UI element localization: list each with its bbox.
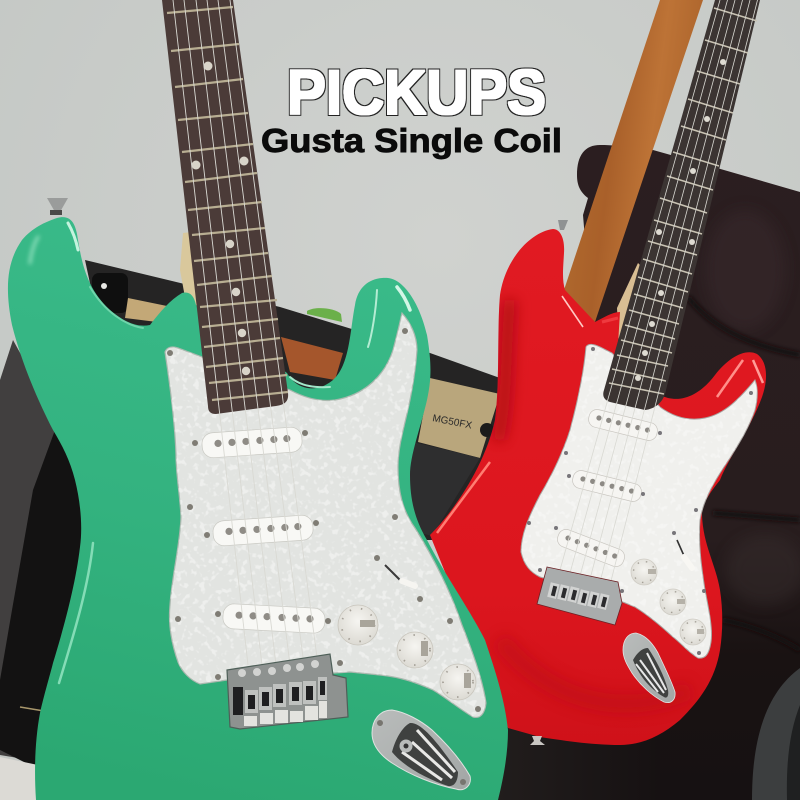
green neck fretboard xyxy=(162,0,288,414)
red jack plate xyxy=(623,633,675,703)
green body highlights xyxy=(30,223,410,683)
green pickup middle xyxy=(212,515,314,546)
red pickup middle xyxy=(571,469,643,503)
green body xyxy=(8,217,508,800)
cream neck side xyxy=(180,232,205,352)
title: PICKUPS: PICKUPS xyxy=(287,58,546,128)
amp grille xyxy=(404,442,480,536)
cabinet black side xyxy=(0,430,85,770)
cabinet gold line xyxy=(20,707,44,711)
red strap button xyxy=(558,220,568,230)
red body xyxy=(430,229,766,745)
green knobs and switch xyxy=(338,565,476,700)
red pickguard xyxy=(520,344,758,659)
green strings xyxy=(173,0,318,665)
amp model label: MG50FX xyxy=(431,413,473,432)
green pickguard xyxy=(164,312,487,718)
subtitle: Gusta Single Coil: Gusta Single Coil xyxy=(261,122,562,159)
green strap button xyxy=(47,198,68,215)
dark speaker cabinet left xyxy=(0,340,90,800)
red pickup neck xyxy=(587,408,659,442)
red guitar xyxy=(430,0,770,745)
green object behind amp xyxy=(307,308,342,322)
amp handle hole xyxy=(92,273,128,313)
red neck fretboard xyxy=(603,0,760,410)
green screws xyxy=(167,328,481,712)
red screws xyxy=(527,347,753,655)
red pickup bridge xyxy=(555,527,627,569)
amp gold control panel xyxy=(418,378,500,458)
sofa xyxy=(577,145,800,800)
green pickup bridge xyxy=(222,603,326,634)
amplifier xyxy=(85,260,500,540)
red body shading and highlights xyxy=(437,296,763,704)
light floor corner xyxy=(0,757,38,800)
green bridge xyxy=(227,654,348,729)
red strings xyxy=(560,0,758,585)
amp side cream panel xyxy=(125,298,167,322)
green pickup neck xyxy=(201,427,303,458)
maple neck back xyxy=(563,0,703,322)
green jack plate xyxy=(372,710,470,790)
vinyl disc xyxy=(752,668,800,800)
green guitar xyxy=(8,0,508,800)
amp knob xyxy=(480,423,494,437)
floor xyxy=(470,715,660,800)
cream sliver by neck xyxy=(617,263,645,347)
amp orange panel xyxy=(281,337,343,380)
red bridge xyxy=(537,567,622,625)
red rear strap button xyxy=(530,736,545,745)
red knobs and switch xyxy=(631,540,706,645)
